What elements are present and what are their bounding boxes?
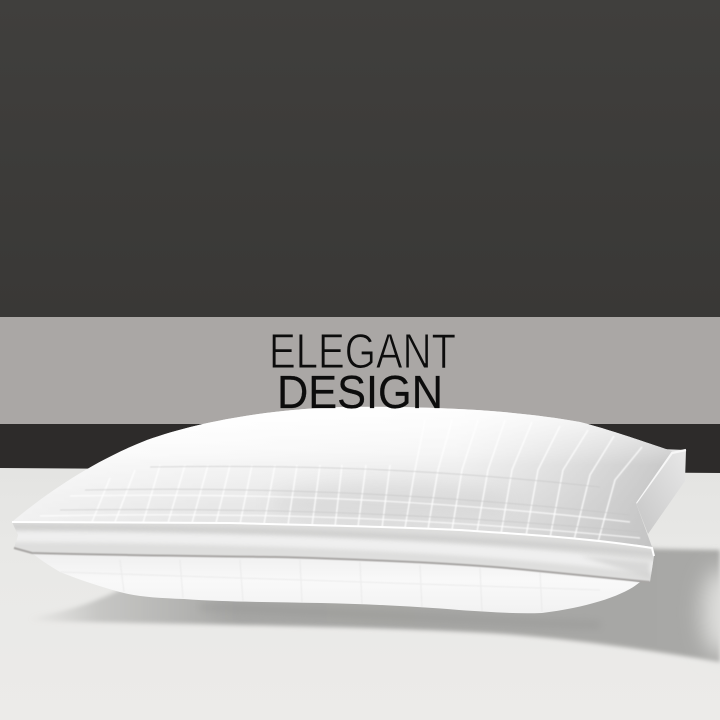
heading line: ELEGANT: ELEGANT bbox=[269, 325, 456, 379]
pillow front gusset band bbox=[12, 523, 654, 582]
pillow cast shadow bbox=[30, 548, 720, 662]
pillow seam bbox=[14, 548, 650, 582]
grey title band bbox=[0, 317, 720, 424]
heading: ELEGANT DESIGN bbox=[269, 325, 456, 418]
table surface bbox=[0, 468, 720, 720]
heading line: DESIGN: DESIGN bbox=[277, 366, 443, 418]
pillow top face bbox=[14, 406, 672, 547]
dark wall background bbox=[0, 0, 720, 317]
pillow bbox=[0, 400, 700, 620]
quilted grid lines bbox=[50, 430, 642, 540]
pillow right gusset bbox=[636, 449, 686, 534]
dark wall strip below band bbox=[0, 424, 720, 474]
pillow piping bbox=[12, 522, 654, 556]
pillow lower face bbox=[36, 554, 640, 614]
